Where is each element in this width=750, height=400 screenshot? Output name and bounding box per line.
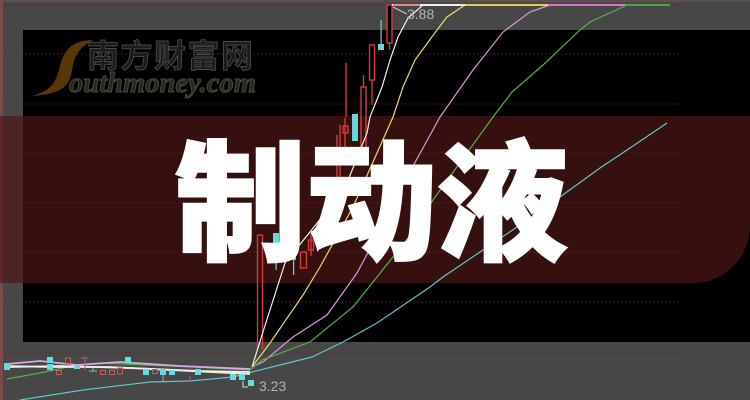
moving average: blue	[20, 123, 667, 400]
top flat segments of averages	[392, 4, 670, 6]
chart plot area	[23, 30, 750, 342]
high price marker: 3.88	[407, 6, 434, 22]
high price marker	[393, 5, 434, 22]
moving average: pink	[252, 5, 625, 367]
logo: Southmoney watermark	[32, 38, 256, 99]
logo Chinese name: 南方财富网	[87, 38, 253, 74]
low price marker: 3.23	[259, 378, 286, 394]
title: 制动液	[175, 131, 568, 278]
cyan candles: main rally	[273, 20, 384, 275]
candlesticks: main rally	[258, 5, 392, 350]
logo domain name: outhmoney.com	[69, 67, 256, 99]
moving average: white	[252, 5, 465, 367]
logo swoosh	[32, 40, 94, 96]
pre-rally candles and averages	[4, 357, 254, 387]
moving average: yellow	[252, 5, 548, 367]
title band	[0, 116, 750, 283]
